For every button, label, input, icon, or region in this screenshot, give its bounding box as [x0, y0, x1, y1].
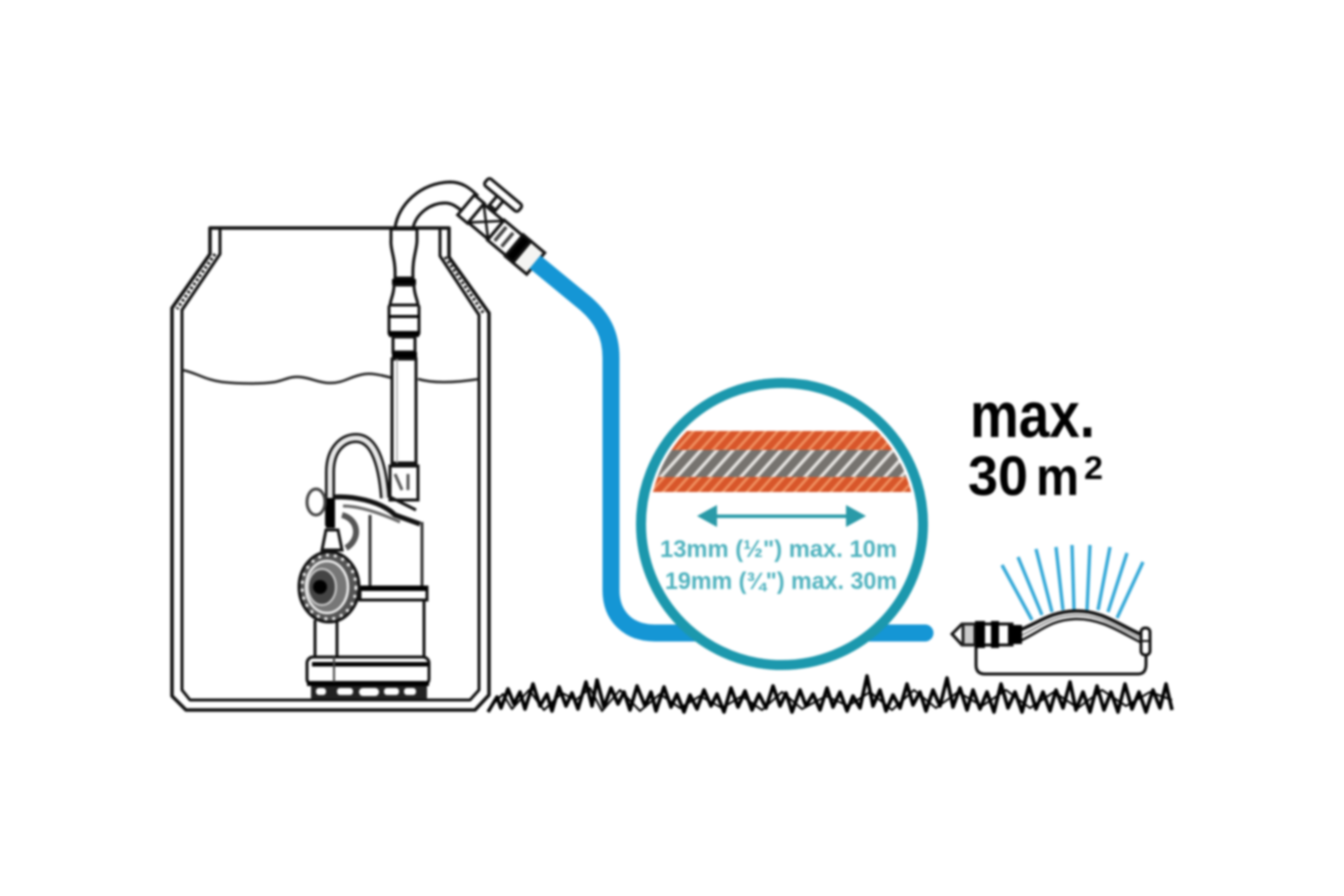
hose length text — [660, 536, 897, 595]
diagram: rain barrel pump to sprinkler — [168, 176, 1176, 716]
float switch — [307, 489, 325, 515]
hose length text: 13mm (½") max. 10m — [660, 536, 897, 563]
submersible pump — [299, 438, 429, 699]
hose rounded end — [916, 624, 934, 642]
coverage label: 2 — [1084, 450, 1103, 486]
water level — [182, 370, 479, 384]
outlet valve with handle — [457, 177, 559, 274]
riser pipe — [389, 229, 419, 463]
coverage label: m — [1036, 447, 1079, 507]
pump base — [307, 657, 429, 685]
pump outlet coupling — [390, 466, 418, 500]
sprinkler water jets — [1002, 545, 1143, 620]
coverage label — [968, 379, 1103, 507]
suction wheel — [299, 552, 359, 622]
lower housing — [315, 600, 424, 657]
garden hose — [535, 262, 926, 633]
coverage label: max. — [970, 379, 1095, 451]
grass — [488, 676, 1172, 712]
sprinkler — [952, 611, 1150, 674]
hose cross-section layers — [630, 431, 930, 492]
hose length text: 19mm (¾") max. 30m — [665, 568, 897, 595]
water tank — [172, 228, 489, 710]
pump body — [370, 515, 422, 587]
double arrow — [697, 505, 866, 527]
sprinkler base — [976, 645, 1146, 674]
elbow to valve — [395, 182, 478, 228]
magnifier circle — [630, 383, 930, 665]
float handle loop — [330, 438, 385, 526]
hose connector — [952, 624, 1012, 645]
sprinkler arm — [1020, 611, 1140, 634]
coverage label: 30 — [968, 444, 1028, 507]
end cap — [1141, 628, 1150, 655]
pump feet — [311, 686, 427, 699]
